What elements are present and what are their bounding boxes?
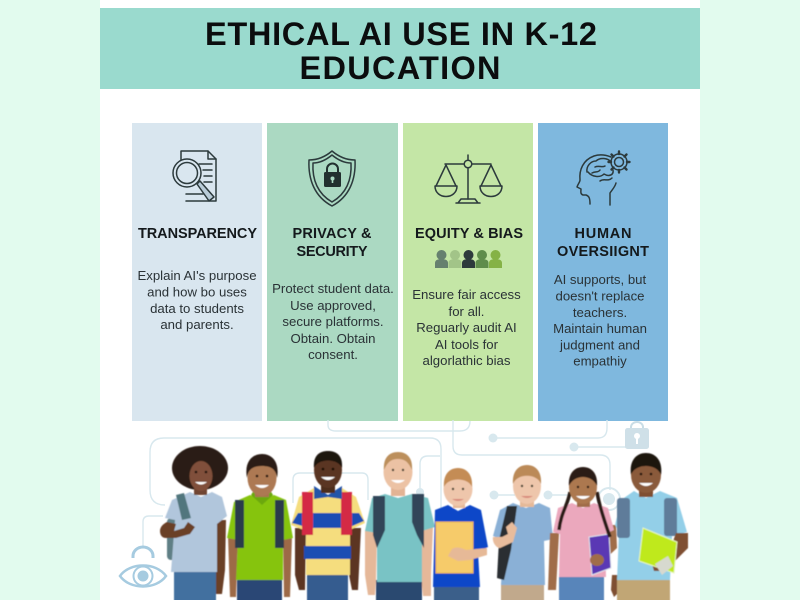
panel: privacy and security: Use approved, [290,298,376,313]
title banner: EDUCATION [300,50,500,86]
panel: privacy and security: Obtain. Obtain [290,331,376,346]
panel: privacy and security: Protect student data. [272,281,394,296]
student 3 [291,451,365,600]
title banner: ETHICAL AI USE IN K-12 [205,16,597,52]
panel: equity and bias: Reguarly audit AI [416,320,517,335]
white page sheet [100,0,700,600]
panel: human oversight: AI supports, but [554,272,647,287]
student 6 [493,465,553,600]
panel: transparency: and parents. [160,317,234,332]
panel: human oversight: teachers. [573,305,627,320]
panel: privacy and security [267,123,398,421]
student 5 [433,468,488,600]
student 1 [160,446,228,600]
panel: equity and bias [403,123,533,421]
panel: human oversight: Maintain human [553,321,647,336]
panel: human oversight: doesn't replace [555,288,645,304]
panel: transparency [132,123,262,421]
panel: human oversight: empathiy [573,354,627,368]
panel: human oversight: judgment and [559,338,640,352]
icon: balance scales [435,155,502,203]
panel: human oversight [538,123,668,421]
panel: human oversight: HUMAN [574,226,632,242]
icon: row of people [435,250,502,268]
icon: head with brain and gear [577,152,630,205]
student 4 [365,452,435,600]
student 7 [548,467,617,600]
panel: transparency: Explain AI's purpose [137,268,257,283]
icon: shield with padlock [309,151,355,206]
circuit background [143,420,626,548]
panel: privacy and security: SECURITY [296,244,368,260]
panel: transparency: and how bo uses [147,284,247,300]
title banner [100,8,700,89]
panel: privacy and security: PRIVACY & [292,226,372,242]
panel: privacy and security: secure platforms. [282,314,384,329]
icon: document with magnifying glass [173,151,216,201]
icon: padlock in circuit [625,422,649,449]
panel: equity and bias: algorlathic bias [423,353,511,368]
student 8 [611,453,688,600]
panel: equity and bias: for all. [449,304,484,319]
icon: eye with lock [120,547,166,586]
student 2 [227,454,293,600]
panel: transparency: TRANSPARENCY [138,226,257,242]
panel: equity and bias: AI tools for [435,337,499,352]
panel: human oversight: OVERSIIGNT [557,244,649,260]
panel: privacy and security: consent. [308,347,358,362]
panel: equity and bias: Ensure fair access [412,287,521,302]
panel: transparency: data to students [150,301,244,316]
students group photo illustration [160,446,688,600]
panel: equity and bias: EQUITY & BIAS [415,226,523,242]
